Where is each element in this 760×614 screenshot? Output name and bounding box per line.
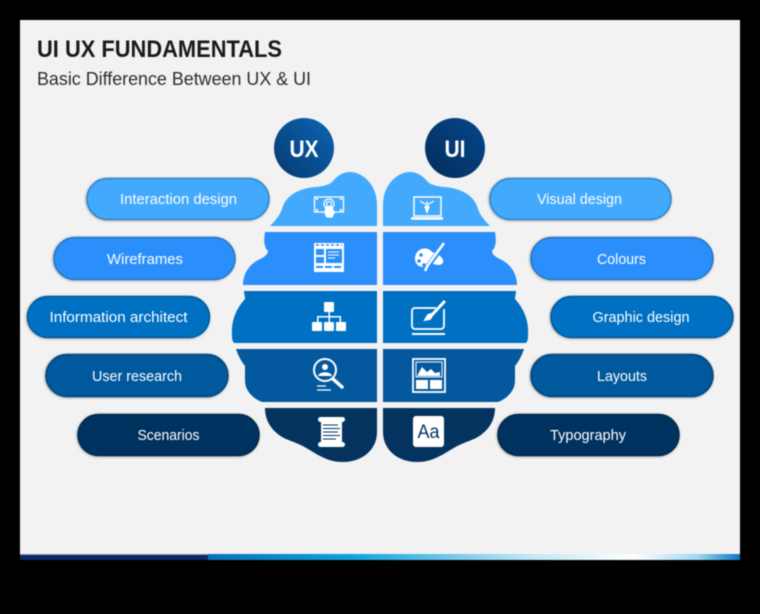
- lobe 5: [265, 408, 377, 462]
- icon: tablet and stylus: [412, 302, 445, 334]
- brain: UI right hemisphere: [383, 172, 528, 462]
- badge: UX: [274, 118, 334, 178]
- icon: typography Aa: [413, 416, 444, 447]
- pill: Wireframes: Wireframes: [107, 252, 183, 268]
- pill: Colours: [531, 238, 713, 280]
- icon: interaction gesture: [314, 197, 344, 217]
- pill: Interaction design: [87, 178, 269, 220]
- pill: Scenarios: Scenarios: [138, 428, 200, 444]
- badge: UX: UX: [290, 136, 318, 163]
- badge: UI: UI: [444, 136, 466, 163]
- subtitle: Basic Difference Between UX & UI: [37, 69, 311, 89]
- pill: Typography: [498, 414, 679, 456]
- lobe 2: [383, 232, 517, 285]
- icon: hierarchy: [312, 302, 346, 331]
- pill: Layouts: Layouts: [597, 369, 647, 385]
- icon: typography Aa: Aa: [418, 422, 440, 443]
- pill: Visual design: [490, 178, 671, 220]
- lobe 2: [243, 232, 377, 285]
- pill: User research: [46, 354, 228, 396]
- pill: Wireframes: [54, 238, 235, 280]
- pill: Graphic design: Graphic design: [592, 310, 690, 326]
- lobe 5: [383, 408, 495, 462]
- icon: paint palette: [415, 243, 445, 271]
- lobe 3: [232, 291, 377, 343]
- icon: layout frame: [413, 359, 445, 392]
- pill: Information architect: [28, 296, 210, 338]
- icon: scenario scroll: [318, 417, 345, 447]
- pill: Typography: Typography: [550, 428, 627, 444]
- pill: Visual design: Visual design: [537, 192, 622, 208]
- pill: Graphic design: [551, 296, 733, 338]
- pill: Scenarios: [78, 414, 259, 456]
- lobe 4: [383, 349, 524, 402]
- lobe 1: [383, 172, 490, 226]
- pill: User research: User research: [92, 369, 182, 385]
- brain: UX left hemisphere: [232, 172, 377, 462]
- icon: laptop vector design: [411, 197, 443, 218]
- pill: Layouts: [531, 354, 713, 396]
- lobe 1: [270, 172, 377, 226]
- icon: user research magnifier: [314, 359, 342, 390]
- pill: Colours: Colours: [597, 252, 646, 268]
- lobe 3: [383, 291, 528, 343]
- title: UI UX FUNDAMENTALS: [37, 36, 282, 63]
- pill: Interaction design: Interaction design: [120, 192, 237, 208]
- icon: wireframe layout: [314, 243, 344, 272]
- pill: Information architect: Information architect: [50, 310, 188, 326]
- lobe 4: [236, 349, 377, 402]
- badge: UI: [425, 118, 485, 178]
- footer bar: [20, 554, 740, 560]
